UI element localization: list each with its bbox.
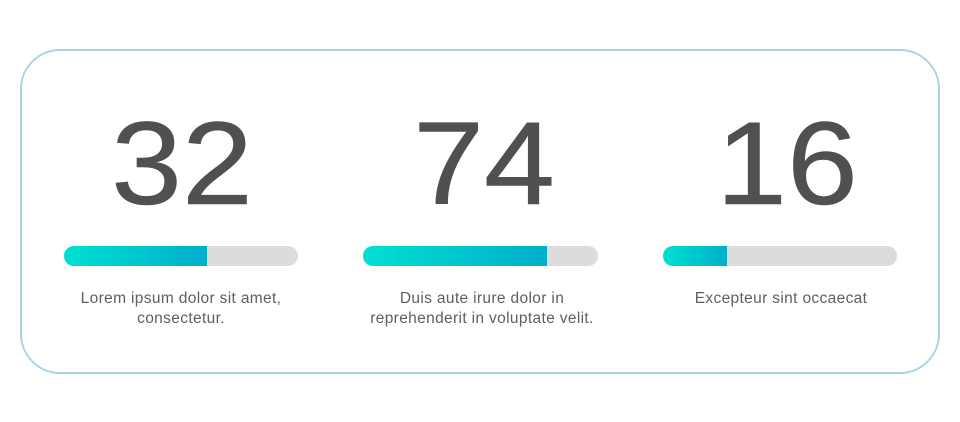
stat number: 16: 16	[716, 98, 857, 230]
progress bar: 16	[663, 246, 897, 266]
stat number: 32: 32	[111, 98, 253, 230]
text block: second description: Duis aute irure dolor in	[400, 290, 564, 307]
bar fill: 32	[64, 246, 207, 266]
text block: third description: Excepteur sint occaecat	[695, 290, 867, 307]
bar fill: 16	[663, 246, 727, 266]
progress bar: 32	[64, 246, 298, 266]
panel: rounded stats frame	[20, 49, 940, 374]
bar fill: 74	[363, 246, 547, 266]
text block: first description: consectetur.	[137, 310, 225, 327]
text block: second description: reprehenderit in voluptate velit.	[370, 310, 594, 327]
stat number: 74: 74	[413, 98, 555, 230]
text block: first description: Lorem ipsum dolor sit amet,	[81, 290, 281, 307]
text block: second description	[370, 290, 594, 327]
progress bar: 74	[363, 246, 598, 266]
text block: first description	[81, 290, 281, 327]
